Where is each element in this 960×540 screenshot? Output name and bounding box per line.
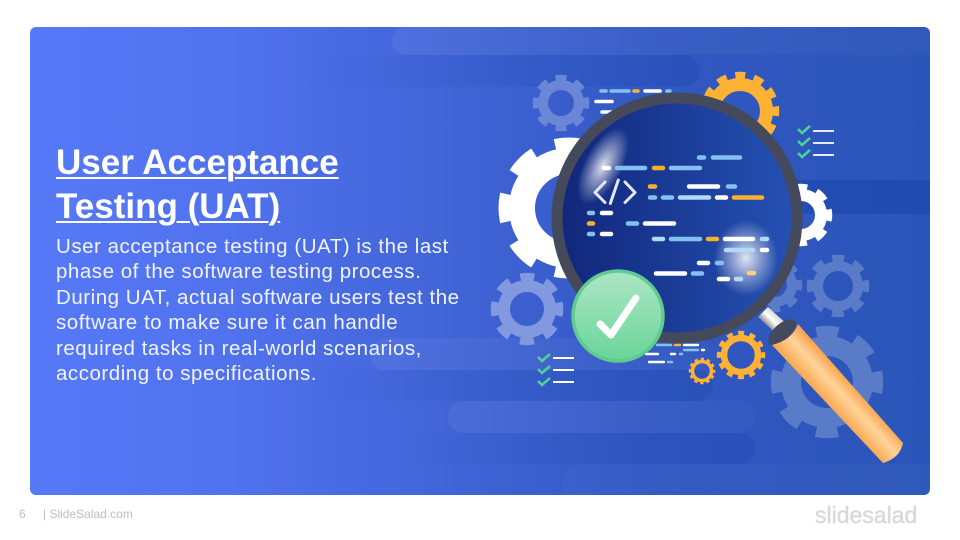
gear: large lower right translucent (776, 331, 878, 433)
gear: orange small (690, 359, 714, 383)
page number: 6 (19, 507, 26, 521)
logo wordmark: slidesalad (815, 502, 917, 528)
gear: partly hidden translucent (750, 260, 800, 310)
text block: description: phase of the software testing process. (56, 260, 421, 283)
footer site label: | SlideSalad.com (43, 507, 133, 521)
magnifier lens (557, 98, 797, 338)
text block: description (56, 234, 460, 385)
gear: lower left translucent (494, 276, 560, 342)
illustration: magnifying glass with gears and code (370, 27, 930, 463)
text block: description: according to specifications. (56, 362, 317, 385)
code lines outside lens top (596, 91, 670, 112)
icon: code brackets (595, 180, 635, 204)
title: Testing (UAT) (56, 187, 280, 226)
text block: description: required tasks in real-world scenarios, (56, 337, 422, 360)
gear: right white (773, 187, 829, 243)
title: User Acceptance (56, 143, 339, 182)
gear: right translucent (810, 258, 866, 314)
checklist: bottom left (538, 354, 574, 385)
text block: description: During UAT, actual software users test the (56, 286, 460, 309)
gear: large white (505, 144, 633, 272)
checklist: top right (798, 126, 834, 157)
gear: orange medium (719, 333, 763, 377)
code lines outside lens bottom (646, 345, 704, 362)
background stripes (370, 27, 930, 463)
magnifier handle (758, 307, 903, 463)
gear: top orange (704, 75, 776, 147)
icon: green check badge (573, 271, 663, 361)
text block: description: software to make sure it can handle (56, 311, 398, 334)
lens highlights (578, 130, 776, 294)
code lines inside lens (589, 158, 767, 279)
text block: description: User acceptance testing (UAT) is the last (56, 234, 449, 258)
title (56, 143, 339, 226)
gear: top left translucent (536, 78, 586, 128)
